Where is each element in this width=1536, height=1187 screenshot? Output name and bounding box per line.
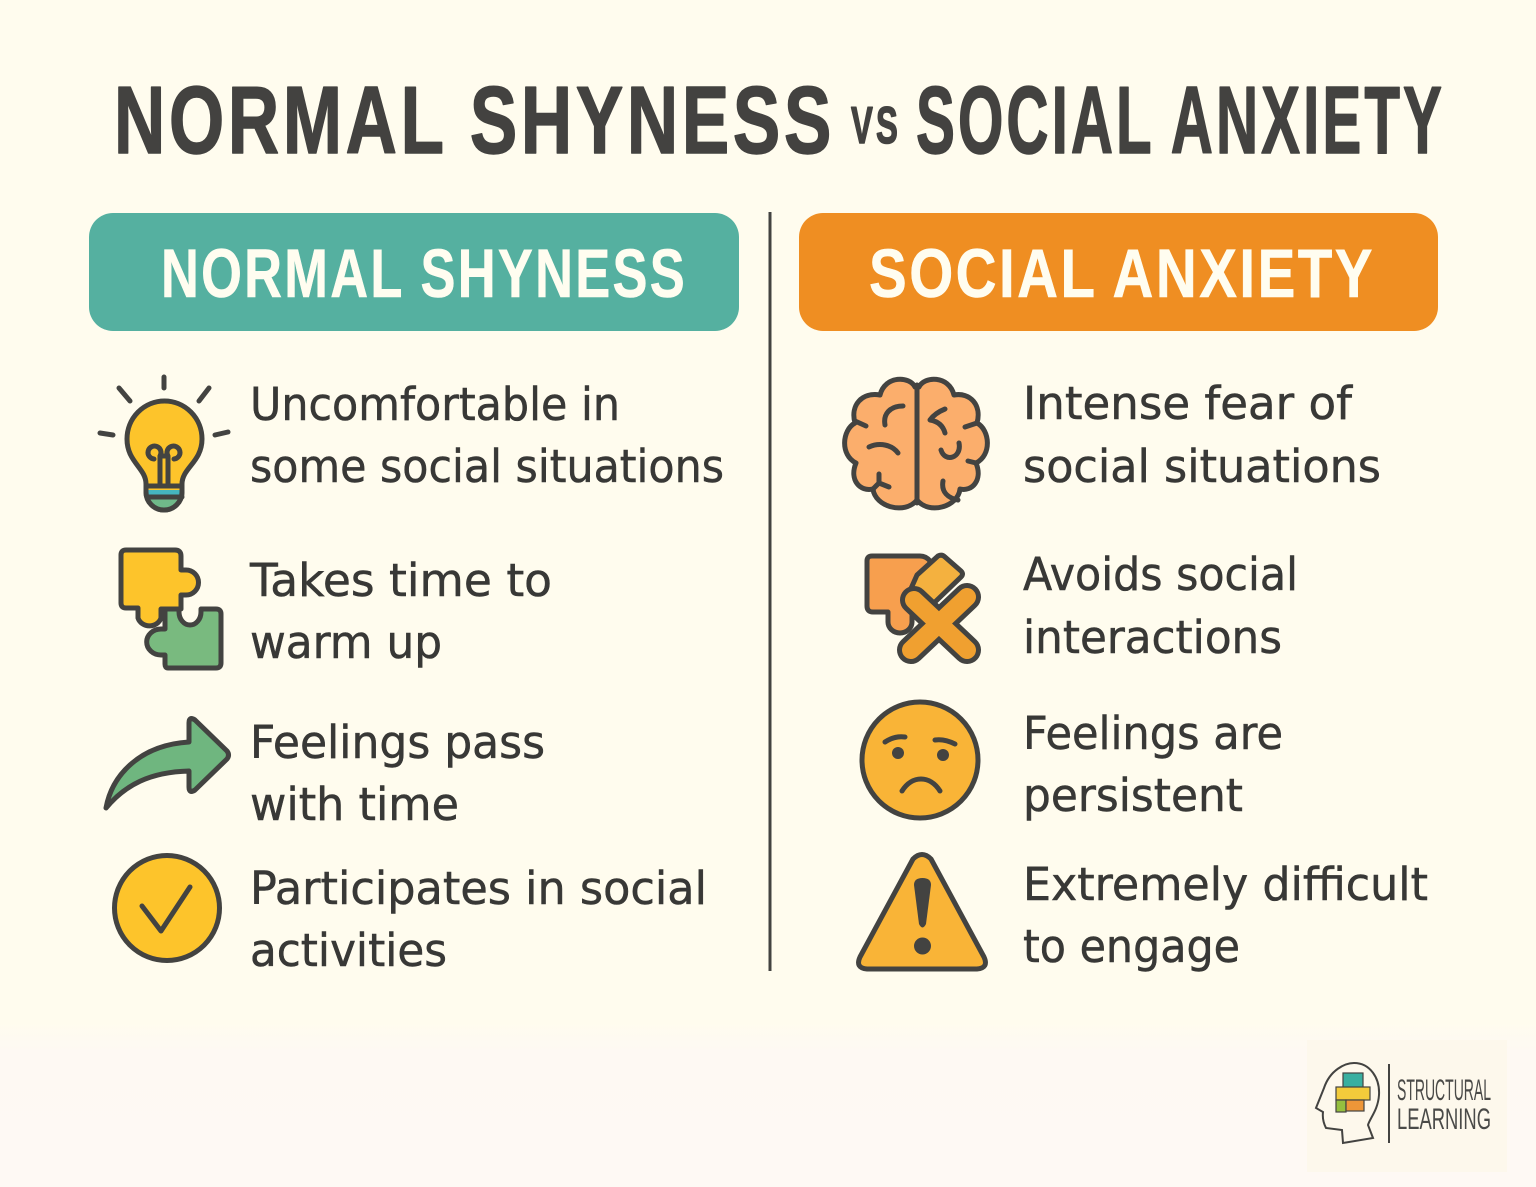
heading: social anxiety [799, 213, 1438, 331]
text: feelings persistent [1023, 707, 1283, 822]
text: feelings pass: Feelings pass [250, 716, 545, 769]
icon: head with blocks [1316, 1063, 1379, 1143]
text: takes time: Takes time to [249, 554, 552, 607]
icon: light bulb [100, 377, 228, 511]
text: takes time [249, 554, 552, 669]
icon: brain [845, 379, 987, 508]
icon: puzzle pieces [121, 550, 221, 668]
text: intense fear: Intense fear of [1023, 377, 1353, 430]
panel: normal shyness [89, 213, 739, 977]
text: extremely difficult: to engage [1023, 920, 1240, 973]
icon: warning triangle [859, 854, 985, 969]
text: uncomfortable: some social situations [250, 440, 724, 493]
text: intense fear: social situations [1023, 440, 1381, 493]
title: NORMAL SHYNESS [114, 67, 835, 174]
icon: check circle [114, 856, 220, 960]
text: intense fear [1023, 377, 1381, 493]
text: feelings persistent: Feelings are [1023, 707, 1283, 760]
title: VS [851, 97, 901, 155]
heading: normal shyness: NORMAL SHYNESS [161, 235, 687, 312]
text: participates: Participates in social [250, 862, 707, 915]
text: feelings pass [250, 716, 545, 831]
text: participates: activities [250, 924, 447, 977]
text: feelings pass: with time [250, 778, 459, 831]
text: uncomfortable [250, 378, 724, 493]
heading: social anxiety: SOCIAL ANXIETY [869, 235, 1375, 312]
text: extremely difficult [1023, 858, 1428, 973]
text: participates [250, 862, 707, 977]
text: extremely difficult: Extremely difficult [1023, 858, 1428, 911]
panel: social anxiety [799, 213, 1438, 973]
icon: sad face [862, 702, 978, 818]
text: takes time: warm up [250, 616, 442, 669]
text: feelings persistent: persistent [1023, 769, 1243, 822]
text: uncomfortable: Uncomfortable in [250, 378, 620, 431]
text: avoids: Avoids social [1023, 548, 1298, 601]
text: avoids: interactions [1023, 611, 1282, 664]
logo: structural learning [1307, 1040, 1507, 1172]
icon: curved arrow [106, 719, 228, 808]
icon: puzzle with cross [867, 555, 967, 650]
text: avoids [1023, 548, 1298, 664]
heading: normal shyness [89, 213, 739, 331]
